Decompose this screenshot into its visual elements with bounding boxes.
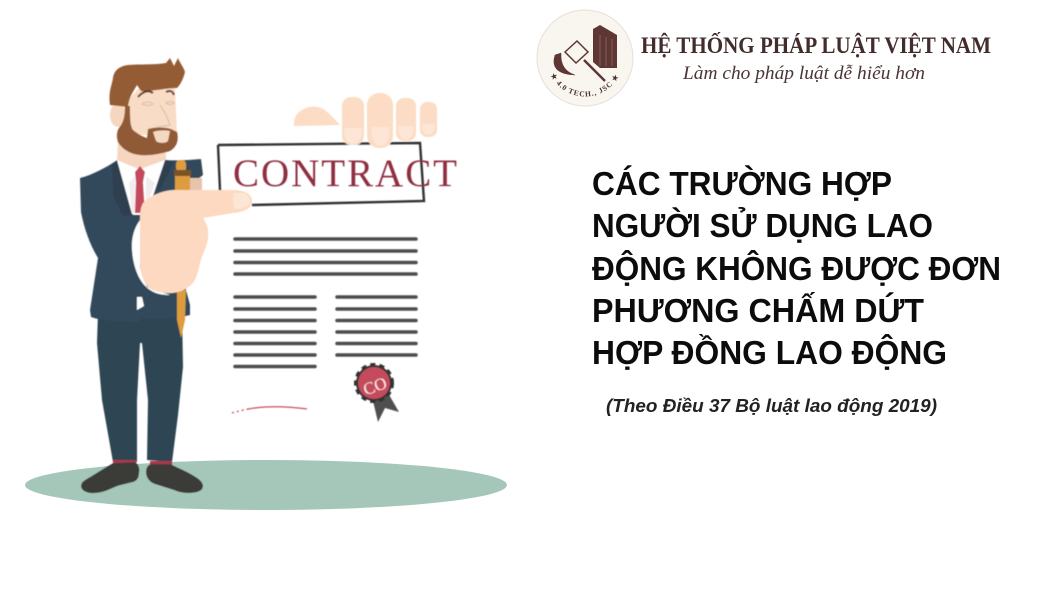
legal reference subtitle: (Theo Điều 37 Bộ luật lao động 2019) [606,396,937,416]
shirt shade [129,176,155,213]
pointing hand [140,190,252,293]
text lines: left column [235,297,315,366]
main title: HỢP ĐỒNG LAO ĐỘNG [592,333,947,371]
fingernail [233,193,250,209]
text lines: full width [235,239,416,274]
seal outer [356,365,392,401]
holding hand [294,93,437,148]
tie [135,166,145,213]
little finger [420,102,437,137]
shirt [117,160,165,214]
socks [113,460,172,468]
pen lower [177,290,186,338]
beard [117,106,178,155]
main title: NGƯỜI SỬ DỤNG LAO [592,207,933,244]
jacket [80,159,203,322]
illustration: businessman [80,58,252,492]
pen band [174,170,191,176]
fingernails [344,124,435,146]
thumb [294,106,340,126]
neck [117,140,166,170]
brand tagline: Làm cho pháp luật dễ hiểu hơn [682,63,925,84]
seal ribbon [373,393,399,422]
ear [110,103,126,127]
logo disc [537,10,633,106]
index finger [342,97,364,145]
icon: books [593,25,617,68]
seal text: CO [361,373,389,399]
pen cap [176,160,186,172]
trousers [97,312,183,462]
main title: CÁC TRƯỜNG HỢP [592,165,892,202]
signature [232,407,307,413]
shoes [82,463,202,492]
seal inner [358,367,390,399]
hair [109,58,185,107]
jacket lapel shade [112,160,174,216]
eyes and nose [142,102,174,127]
seal [356,365,399,422]
shirt cuff [132,214,170,295]
ground ellipse [25,460,507,510]
shirt lower gap [137,297,144,310]
eyebrows [138,91,174,97]
logo [536,10,991,106]
chin patch [153,130,170,143]
middle finger [367,93,393,148]
document [218,93,457,422]
brand name: HỆ THỐNG PHÁP LUẬT VIỆT NAM [641,32,991,58]
face [128,87,177,135]
heading: CONTRACT: CONTRACT [233,152,457,195]
text lines: right column [337,297,416,355]
pocket skin [190,178,202,192]
contract title box [218,143,424,205]
pen body [175,176,190,192]
pen [174,160,191,338]
main title [592,165,1001,371]
ring finger [396,98,416,141]
logo circular caption: ★ 4.0 TECH., JSC ★ [550,73,618,97]
icon: gavel [554,41,605,81]
head [109,58,185,155]
main title: ĐỘNG KHÔNG ĐƯỢC ĐƠN [592,249,1001,287]
main title: PHƯƠNG CHẤM DỨT [592,292,924,329]
